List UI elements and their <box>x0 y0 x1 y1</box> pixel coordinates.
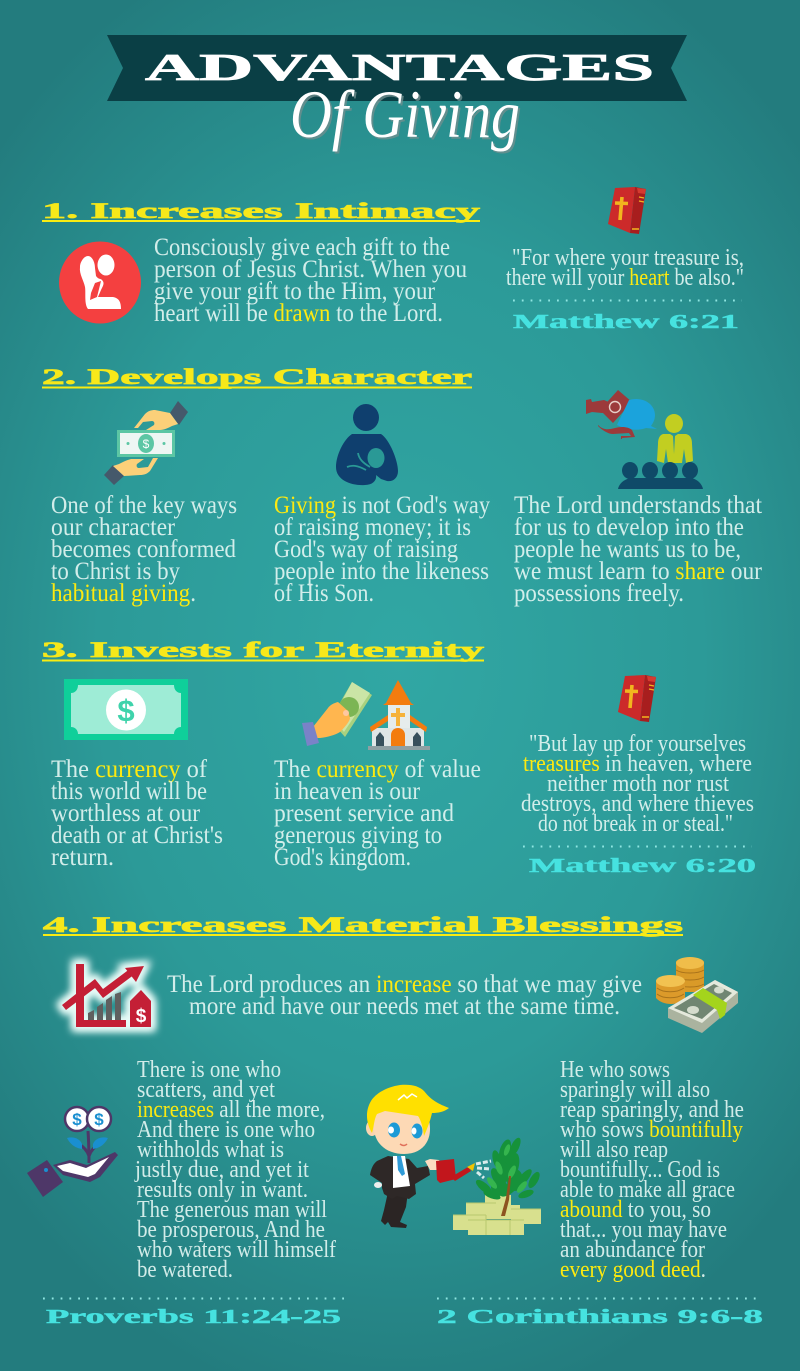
icon: hand giving money to church <box>302 680 430 750</box>
icon: dollar bill: $ <box>117 693 135 728</box>
reference: 2 Corinthians 9:6-8: 2 Corinthians 9:6-8 <box>437 1306 763 1328</box>
text: Proverbs passage: results only in want. <box>137 1177 308 1203</box>
icon: praying figure <box>59 242 141 324</box>
text: Corinthians passage: abound to you, so <box>560 1197 711 1223</box>
text: column 1: our character <box>51 512 175 541</box>
text: Corinthians passage: sparingly will also <box>560 1077 710 1103</box>
text: column 2: of raising money; it is <box>274 512 471 541</box>
text: column 1: habitual giving. <box>51 578 196 607</box>
reference: Matthew 6:21: Matthew 6:21 <box>513 311 739 333</box>
quote: Matthew 6:20: treasures in heaven, where <box>523 751 752 777</box>
panel: section 3 invests for eternity <box>42 637 756 877</box>
heading 4: 4. Increases Material Blessings <box>43 912 684 937</box>
title ribbon <box>107 35 687 101</box>
text: column 1: The currency of <box>51 754 207 783</box>
text: Corinthians passage: will also reap <box>560 1137 668 1163</box>
text: column 3: The Lord understands that <box>514 490 762 519</box>
text: column 3: we must learn to share our <box>514 556 762 585</box>
text: column 1: return. <box>51 842 114 871</box>
text: Corinthians passage: bountifully... God is <box>560 1157 720 1183</box>
icon: bible <box>608 187 646 234</box>
icon: hands exchanging money: $ <box>143 437 150 451</box>
text: Proverbs passage: be watered. <box>137 1257 233 1283</box>
quote: Matthew 6:20: destroys, and where thieves <box>521 791 754 817</box>
text: Proverbs passage: justly due, and yet it <box>134 1157 309 1183</box>
icon: teaching people to share <box>586 390 703 489</box>
text: column 2: present service and <box>274 798 454 827</box>
text: column 1: becomes conformed <box>51 534 236 563</box>
text: column 1 <box>51 754 223 871</box>
text: Corinthians passage: reap sparingly, and he <box>560 1097 744 1123</box>
panel: section 2 develops character <box>42 364 762 607</box>
text: Corinthians passage: an abundance for <box>560 1237 705 1263</box>
title: Advantages: ADVANTAGES <box>145 47 654 89</box>
illustration: boy watering money plant <box>366 1085 542 1235</box>
text: Proverbs passage: be prosperous, And he <box>137 1217 325 1243</box>
text: give each gift: person of Jesus Christ. When you <box>154 254 467 283</box>
panel: section 1 increases intimacy <box>42 187 744 333</box>
icon: rising chart <box>62 964 151 1027</box>
text: column 1: this world will be <box>51 776 207 805</box>
text: Corinthians passage <box>560 1057 744 1283</box>
text: column 2 <box>274 754 481 871</box>
text: give each gift: Consciously give each gift to the <box>154 232 450 261</box>
text: give each gift <box>154 232 467 327</box>
text: column 3: possessions freely. <box>514 578 684 607</box>
text: column 3: people he wants us to be, <box>514 534 741 563</box>
text: column 2: God's way of raising <box>274 534 458 563</box>
text: column 2: Giving is not God's way <box>274 490 490 519</box>
text: give each gift: heart will be drawn to the Lord. <box>154 298 443 327</box>
icon: mother and child <box>336 404 398 485</box>
text: Lord produces an increase: more and have our needs met at the same time. <box>189 991 620 1020</box>
icon: bible <box>618 675 656 722</box>
heading 1: 1. Increases Intimacy <box>42 198 480 223</box>
text: Proverbs passage <box>134 1057 336 1283</box>
reference: Proverbs 11:24-25: Proverbs 11:24-25 <box>46 1306 341 1328</box>
subtitle: Of Giving: Of Giving <box>292 78 522 154</box>
text: column 1 <box>51 490 237 607</box>
text: column 1: death or at Christ's <box>51 820 223 849</box>
text: column 2 <box>274 490 490 607</box>
reference: Matthew 6:20: Matthew 6:20 <box>529 855 756 877</box>
text: give each gift: give your gift to the Him, your <box>154 276 435 305</box>
subtitle: Of Giving: Of Giving <box>290 76 520 152</box>
quote: Matthew 6:20: "But lay up for yourselves <box>529 731 746 757</box>
text: column 2: in heaven is our <box>274 776 420 805</box>
text: Proverbs passage: withholds what is <box>137 1137 284 1163</box>
text: column 2: The currency of value <box>274 754 481 783</box>
icon: hands exchanging money <box>104 401 188 485</box>
quote: Matthew 6:20 <box>521 731 754 837</box>
text: column 1: to Christ is by <box>51 556 180 585</box>
text: column 2: people into the likeness <box>274 556 489 585</box>
icon: hand with money plant: $ <box>94 1110 104 1129</box>
text: Corinthians passage: who sows bountifully <box>560 1117 743 1143</box>
icon: hand with money plant <box>27 1107 118 1197</box>
text: Lord produces an increase <box>167 969 642 1020</box>
icon: hand with money plant: $ <box>72 1110 82 1129</box>
quote: Matthew 6:21: there will your heart be also." <box>506 265 744 291</box>
text: Proverbs passage: increases all the more, <box>137 1097 325 1123</box>
icon: rising chart: $ <box>136 1006 147 1027</box>
quote: Matthew 6:21 <box>506 245 744 291</box>
text: column 3 <box>514 490 762 607</box>
text: column 1: worthless at our <box>51 798 200 827</box>
text: Proverbs passage: There is one who <box>137 1057 281 1083</box>
quote: Matthew 6:20: neither moth nor rust <box>547 771 729 797</box>
text: Proverbs passage: who waters will himself <box>137 1237 336 1263</box>
heading 2: 2. Develops Character <box>42 364 472 389</box>
panel: section 4 increases material blessings <box>27 912 763 1328</box>
text: Proverbs passage: scatters, and yet <box>137 1077 275 1103</box>
text: Proverbs passage: The generous man will <box>137 1197 327 1223</box>
icon: coins and cash <box>656 957 738 1033</box>
text: Corinthians passage: able to make all grace <box>560 1177 735 1203</box>
text: column 2: generous giving to <box>274 820 442 849</box>
quote: Matthew 6:21: "For where your treasure is, <box>512 245 744 271</box>
text: Corinthians passage: every good deed. <box>560 1257 706 1283</box>
text: column 3: for us to develop into the <box>514 512 744 541</box>
quote: Matthew 6:20: do not break in or steal." <box>538 811 733 837</box>
heading 3: 3. Invests for Eternity <box>42 637 484 662</box>
text: Corinthians passage: He who sows <box>560 1057 670 1083</box>
text: column 1: One of the key ways <box>51 490 237 519</box>
text: column 2: of His Son. <box>274 578 374 607</box>
text: Lord produces an increase: The Lord produces an increase so that we may give <box>167 969 642 998</box>
text: column 2: God's kingdom. <box>274 842 411 871</box>
text: Proverbs passage: And there is one who <box>137 1117 315 1143</box>
text: Corinthians passage: that... you may have <box>560 1217 727 1243</box>
title block <box>107 35 687 154</box>
icon: dollar bill <box>64 679 188 740</box>
